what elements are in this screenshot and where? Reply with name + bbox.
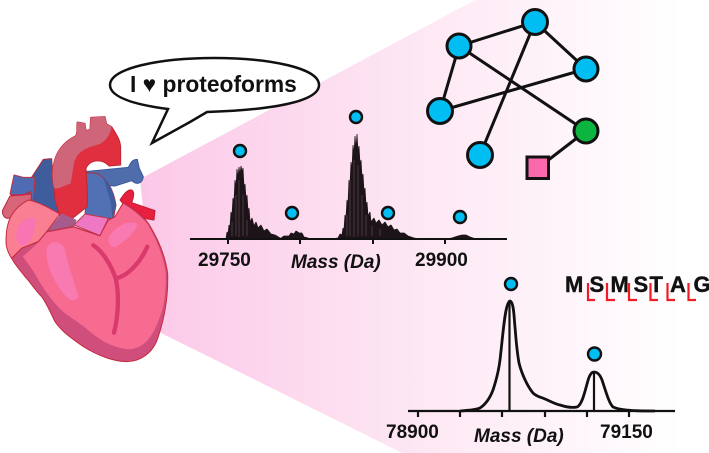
bottom spectrum: [386, 278, 675, 447]
ventricle outline band: [12, 203, 168, 362]
left red streak: [11, 192, 32, 195]
pulmonary trunk: [85, 173, 116, 219]
speech bubble: [110, 58, 319, 143]
axis title: Mass (Da): [291, 252, 381, 273]
coronary artery: [93, 245, 147, 333]
superior vena cava: [32, 159, 62, 217]
aorta: [52, 117, 121, 222]
sequence letters: S: [590, 272, 604, 297]
right vessels: [120, 190, 155, 220]
peak markers: [505, 278, 601, 360]
axis label 29750: 29750: [198, 250, 251, 271]
axis label 79150: 79150: [600, 422, 653, 443]
coronary purple patch: [47, 213, 77, 232]
sequence fragment map: [565, 272, 709, 300]
blue nodes: [428, 10, 598, 168]
network edges: [440, 22, 586, 168]
bubble text: I ♥ proteoforms: [130, 71, 297, 97]
peak markers: [234, 111, 466, 223]
spectrum streaks: [232, 160, 380, 237]
bubble outline: [110, 58, 319, 143]
network diagram: [428, 10, 598, 178]
atrium highlight: [16, 218, 36, 246]
trunk shadow: [103, 177, 116, 218]
sequence letters: [565, 272, 709, 297]
pink central patch: [74, 214, 108, 236]
sequence letters: T: [650, 272, 664, 297]
axis line: [408, 411, 675, 417]
axis label 78900: 78900: [386, 422, 439, 443]
ventricle highlight right: [108, 222, 137, 247]
ventricle body: [23, 204, 166, 349]
left atrium: [6, 200, 60, 258]
axis label 29900: 29900: [415, 250, 468, 271]
left vein: [10, 175, 35, 200]
sequence letters: M: [565, 272, 583, 297]
pulmonary vein right: [85, 159, 143, 186]
axis title: Mass (Da): [474, 426, 564, 447]
green node: [574, 119, 598, 143]
top spectrum: [190, 111, 507, 273]
pink square node: [527, 157, 548, 178]
left artery: [3, 194, 32, 218]
peak stems: [510, 302, 594, 411]
fragment cleavage marks: [588, 283, 696, 300]
aorta light band: [52, 117, 112, 188]
spectrum peaks: [226, 134, 476, 239]
heart illustration: [3, 117, 168, 362]
smooth trace: [460, 301, 655, 411]
sequence letters: M: [610, 272, 629, 297]
ventricle highlight left: [46, 242, 78, 300]
sequence letters: S: [634, 272, 648, 297]
sequence letters: A: [670, 272, 686, 297]
spectrum axis: [190, 239, 507, 244]
